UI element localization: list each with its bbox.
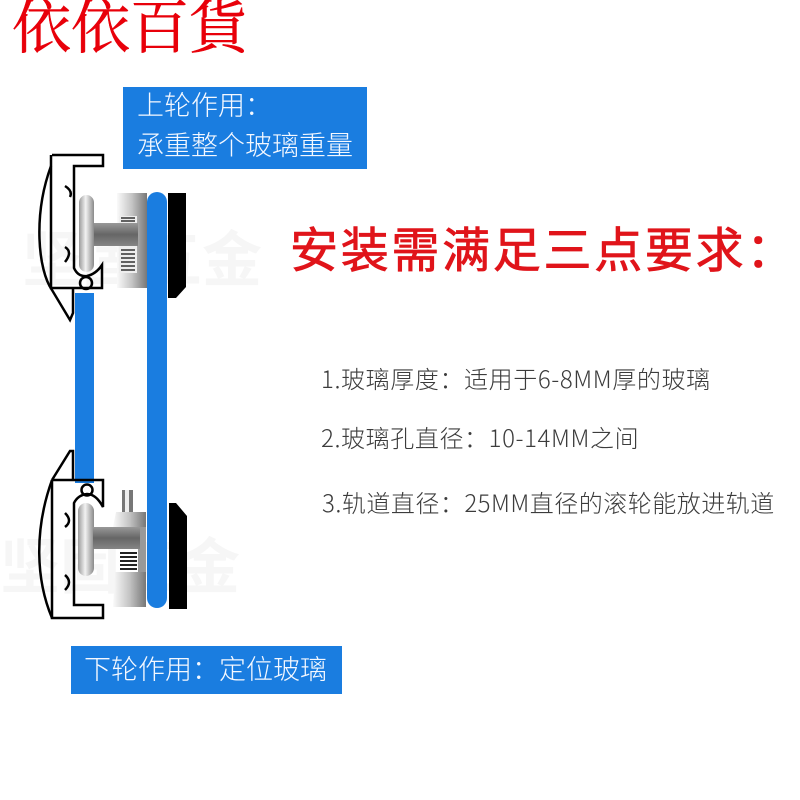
lower wheel (78, 490, 146, 607)
lower black seal (169, 503, 187, 609)
glass panel: inner (75, 293, 94, 483)
glass panel: outer (147, 192, 167, 608)
callout: upper wheel: 上轮作用： (137, 84, 272, 123)
callout: upper wheel (123, 87, 367, 169)
upper black seal (168, 193, 186, 298)
upper rail (39, 155, 103, 320)
callout: lower wheel: 下轮作用：定位玻璃 (84, 648, 327, 687)
requirement 1: 1.玻璃厚度：适用于6-8MM厚的玻璃 (321, 360, 711, 395)
requirement 2: 2.玻璃孔直径：10-14MM之间 (321, 419, 639, 454)
upper wheel (79, 193, 147, 288)
heading: three requirements: 安装需满足三点要求： (290, 211, 797, 281)
callout: upper wheel: 承重整个玻璃重量 (137, 124, 353, 163)
requirements list (321, 360, 775, 519)
lower rail (39, 451, 103, 618)
watermark: lower: 坚固五金 (0, 519, 240, 606)
watermark: upper: 坚固五金 (22, 212, 262, 299)
requirement 3: 3.轨道直径：25MM直径的滚轮能放进轨道 (322, 484, 775, 519)
